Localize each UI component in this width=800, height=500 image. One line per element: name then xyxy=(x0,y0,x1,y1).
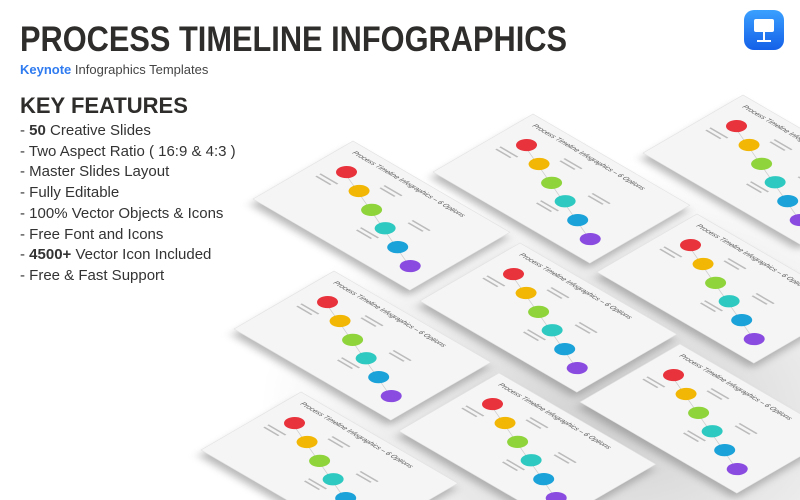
features list: - 50 Creative Slides xyxy=(20,122,151,139)
features list xyxy=(20,122,236,284)
features list: - 100% Vector Objects & Icons xyxy=(20,205,223,222)
slide: bottom right xyxy=(574,344,800,499)
features list: - 4500+ Vector Icon Included xyxy=(20,246,211,263)
features list: - Two Aspect Ratio ( 16:9 & 4:3 ) xyxy=(20,143,236,160)
features list: - Master Slides Layout xyxy=(20,163,169,180)
heading: key features: KEY FEATURES xyxy=(20,93,188,118)
slide: top left xyxy=(247,141,514,296)
slide: middle right xyxy=(591,214,800,369)
slide: top right xyxy=(637,95,800,250)
features list: - Free Font and Icons xyxy=(20,226,163,243)
subtitle: Keynote Infographics Templates xyxy=(20,62,208,77)
features list: - Fully Editable xyxy=(20,184,119,201)
slide: center xyxy=(414,243,681,398)
slide: top middle xyxy=(427,114,694,269)
slide: middle left xyxy=(228,271,495,426)
slide: bottom left xyxy=(195,392,462,500)
icon: keynote logo xyxy=(744,10,784,50)
background shading xyxy=(200,80,800,500)
slide: bottom middle xyxy=(393,373,660,500)
features list: - Free & Fast Support xyxy=(20,267,164,284)
